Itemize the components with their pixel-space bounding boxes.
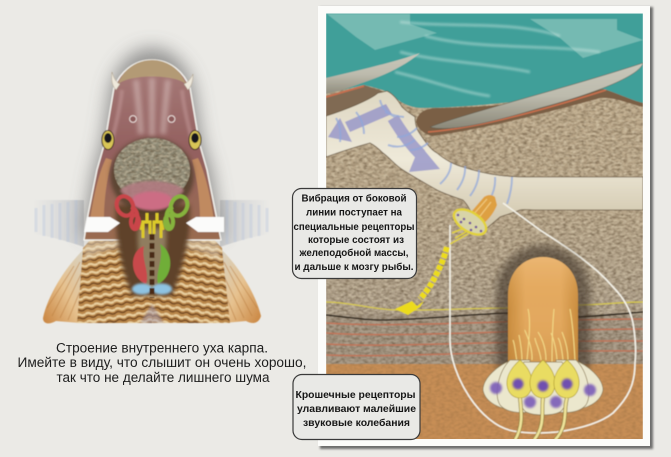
swim bladder blue [132,284,172,294]
side vibration stripes right [220,200,270,247]
whiskers [112,72,193,90]
sand body [326,85,643,320]
right skin band [416,89,643,136]
inner ear red [114,194,139,229]
saccule green [157,244,170,284]
callout: vibration: желеподобной массы, [299,247,409,259]
brain [110,138,194,214]
caption: так что не делайте лишнего шума [56,370,270,385]
callout: vibration: линии поступает на [306,208,402,218]
inner ear green [165,194,190,229]
callout: vibration: и дальше к мозгу рыбы. [294,261,414,273]
nostrils [130,116,175,122]
head shadow halo [82,48,222,235]
left skin band [326,85,385,118]
pectoral fin right [221,250,261,323]
right scale blade [430,63,643,129]
strata band [326,314,643,366]
saccule red [133,246,147,284]
water [326,13,643,113]
nerve fibres [515,398,567,440]
vertebrae [150,234,154,298]
callout: receptors: улавливают малейшие [297,403,416,415]
callout: vibration [292,188,416,278]
arrow: white left [84,217,120,232]
caption: Строение внутреннего уха карпа. [56,340,268,356]
small receptor [450,195,497,244]
callout: receptors: звуковые колебания [303,417,410,429]
water arrow right [530,19,643,58]
head stripes [136,78,168,136]
purple arrow right [393,118,440,172]
callout: receptors [293,374,420,440]
snout band [118,60,186,84]
caption [18,340,306,385]
blue vibration arcs [336,100,512,204]
yellow arrow head [395,301,424,315]
arrow: white right [186,217,224,232]
side gill bands [90,158,214,220]
white teardrop line [450,203,636,433]
yellow dashed nerve [420,247,447,299]
fish head [84,60,221,240]
eye right [189,130,201,150]
jelly capsule [508,257,578,366]
panel: lateral line card [318,6,650,446]
callout: receptors: Крошечные рецепторы [296,389,416,401]
purple arrow left [328,104,392,142]
black layer line [326,312,643,320]
callout: vibration: которые состоят из [308,235,404,246]
callout: vibration: специальные рецепторы [294,222,414,233]
lateral canal [326,91,643,228]
caption: Имейте в виду, что слышит он очень хорошо, [18,355,306,370]
callout: vibration: Вибрация от боковой [302,192,406,204]
yellow nerve line [326,302,643,310]
inner ear yellow [141,213,163,238]
panel: carp inner ear illustration [33,48,270,325]
capsule shadow [496,245,590,370]
orange lower layer [326,364,643,440]
body scales [76,240,230,324]
water arrow left [327,14,437,50]
support cell lobes [483,360,603,415]
sensory hairs [513,309,575,362]
pectoral fin left [43,250,83,323]
eye left [102,130,114,150]
left scale blade [326,53,420,96]
neck dark region [116,205,190,296]
water waves [395,22,600,96]
side vibration stripes left [33,200,84,247]
illustration [326,13,643,440]
sensory cells [483,360,603,440]
purple nuclei [490,382,596,408]
panel shadow [320,7,653,449]
yellow hair cells [507,360,579,398]
